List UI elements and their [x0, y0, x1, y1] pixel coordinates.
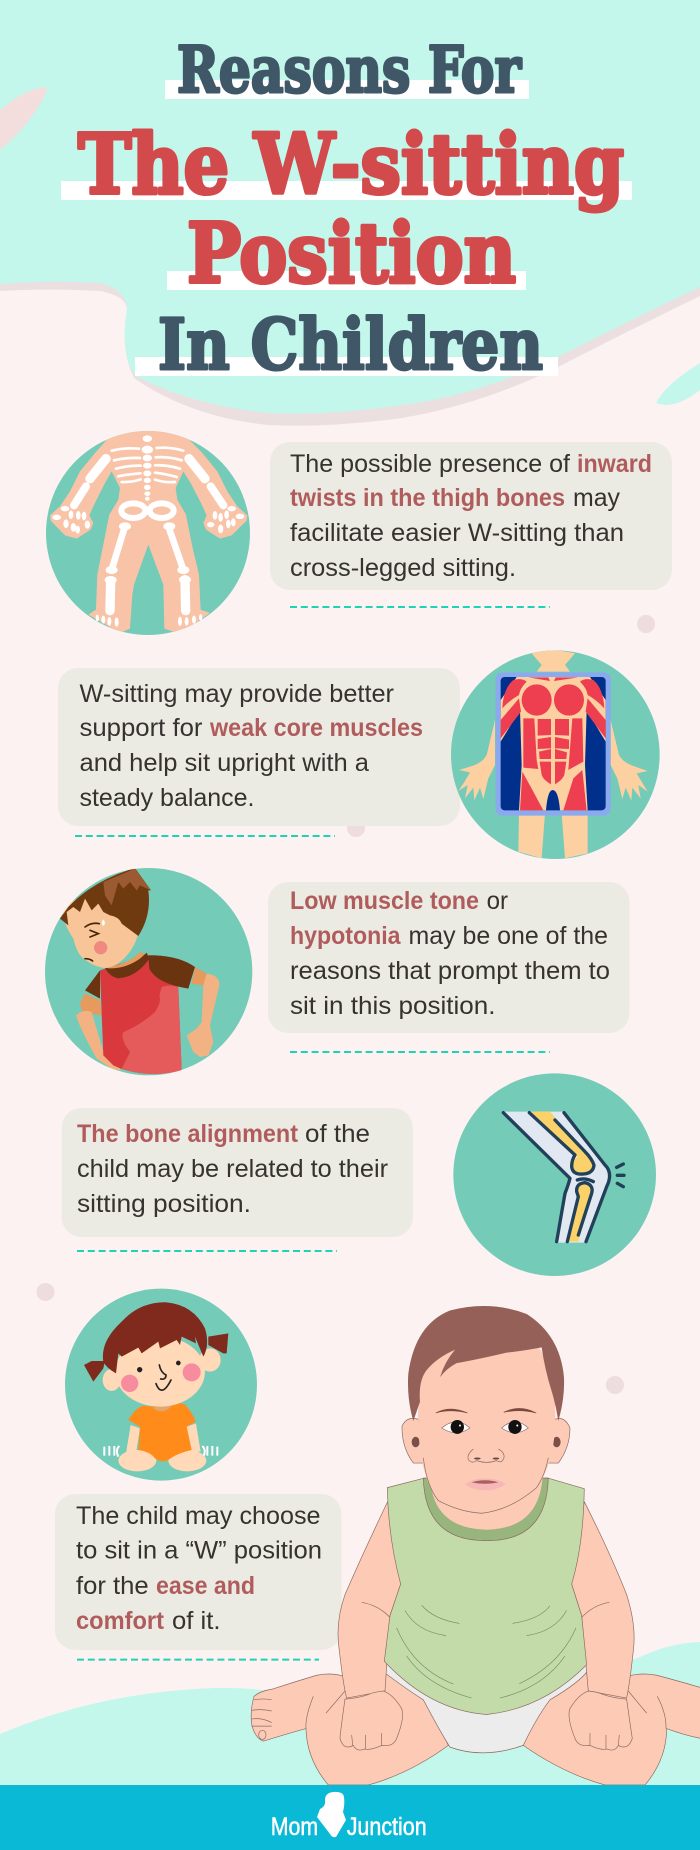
- panel: ease and comfort: The child may choose: [76, 1502, 320, 1530]
- panel: ease and comfort: ease and: [156, 1572, 255, 1600]
- panel: inward thigh twists: twists in the thigh bones: [290, 484, 565, 512]
- panel: low muscle tone: may be one of the: [408, 922, 608, 950]
- footer bar: [0, 1785, 700, 1850]
- background: mint header with wavy edge: [0, 0, 700, 426]
- panel: low muscle tone: or: [487, 887, 508, 915]
- panel: bone alignment: sitting position.: [77, 1190, 251, 1218]
- panel: low muscle tone: sit in this position.: [290, 992, 496, 1020]
- panel: weak core muscles: W-sitting may provide better: [80, 680, 394, 708]
- icon: child holding back in circle: [45, 868, 252, 1075]
- divider under first panel: [290, 606, 550, 608]
- panel: bone alignment: The bone alignment: [77, 1120, 299, 1148]
- divider under third panel: [290, 1051, 550, 1053]
- title line: The W-sitting: The W-sitting: [78, 117, 624, 213]
- panel: weak core muscles: [58, 668, 460, 826]
- decorative dot top right: [637, 615, 655, 633]
- baby shirt: [384, 1475, 587, 1715]
- panel: bone alignment: child may be related to their: [77, 1155, 388, 1183]
- panel: bone alignment: of the: [305, 1120, 370, 1148]
- panel: low muscle tone: [268, 882, 630, 1033]
- panel: inward thigh twists: facilitate easier W-sitting than: [290, 519, 624, 547]
- panel: weak core muscles: steady balance.: [80, 784, 254, 812]
- title line: Position: Position: [187, 206, 516, 302]
- decorative dot right: [606, 1376, 624, 1394]
- panel: low muscle tone: reasons that prompt them to: [290, 957, 610, 985]
- illustration: baby W-sitting: [251, 1306, 700, 1785]
- footer logo: MomJunction: Junction: [347, 1813, 427, 1841]
- icon: skeleton in circle: [46, 428, 250, 635]
- divider under second panel: [75, 835, 335, 837]
- panel: ease and comfort: for the: [76, 1572, 149, 1600]
- panel: weak core muscles: and help sit upright with a: [80, 749, 369, 777]
- baby legs: [251, 1661, 700, 1785]
- panel: ease and comfort: to sit in a “W” position: [76, 1537, 322, 1565]
- icon: girl sitting in circle: [65, 1289, 257, 1481]
- panel: inward thigh twists: The possible presence of: [290, 450, 570, 478]
- panel: inward thigh twists: may: [573, 484, 620, 512]
- icon: torso muscles in circle: [451, 650, 660, 859]
- title line: Reasons For: Reasons For: [177, 33, 522, 108]
- title line: In Children: In Children: [158, 303, 543, 386]
- panel: ease and comfort: comfort: [76, 1607, 165, 1635]
- panel: low muscle tone: hypotonia: [290, 922, 402, 950]
- divider under fourth panel: [77, 1250, 337, 1252]
- panel: ease and comfort: [55, 1494, 342, 1650]
- baby diaper: [383, 1661, 588, 1753]
- bottom mint hill: [0, 1642, 700, 1790]
- panel: inward thigh twists: inward: [577, 450, 652, 478]
- decorative dot middle: [347, 819, 365, 837]
- panel: weak core muscles: support for: [80, 714, 202, 742]
- panel: low muscle tone: Low muscle tone: [290, 887, 479, 915]
- panel: inward thigh twists: cross-legged sitting.: [290, 554, 516, 582]
- panel: ease and comfort: of it.: [172, 1607, 220, 1635]
- title: [61, 33, 632, 386]
- baby face: [408, 1306, 564, 1513]
- panel: weak core muscles: weak core muscles: [209, 714, 423, 742]
- divider under fifth panel: [77, 1659, 319, 1661]
- footer logo: MomJunction: [271, 1792, 427, 1841]
- decorative dot left: [36, 1283, 54, 1301]
- icon: knee joint in circle: [453, 1073, 656, 1276]
- footer logo: MomJunction: Mom: [271, 1813, 318, 1841]
- panel: bone alignment: [62, 1108, 413, 1237]
- panel: inward thigh twists: [270, 442, 672, 590]
- baby ears: [402, 1418, 570, 1463]
- baby hands: [340, 1691, 632, 1750]
- baby arms: [338, 1502, 634, 1698]
